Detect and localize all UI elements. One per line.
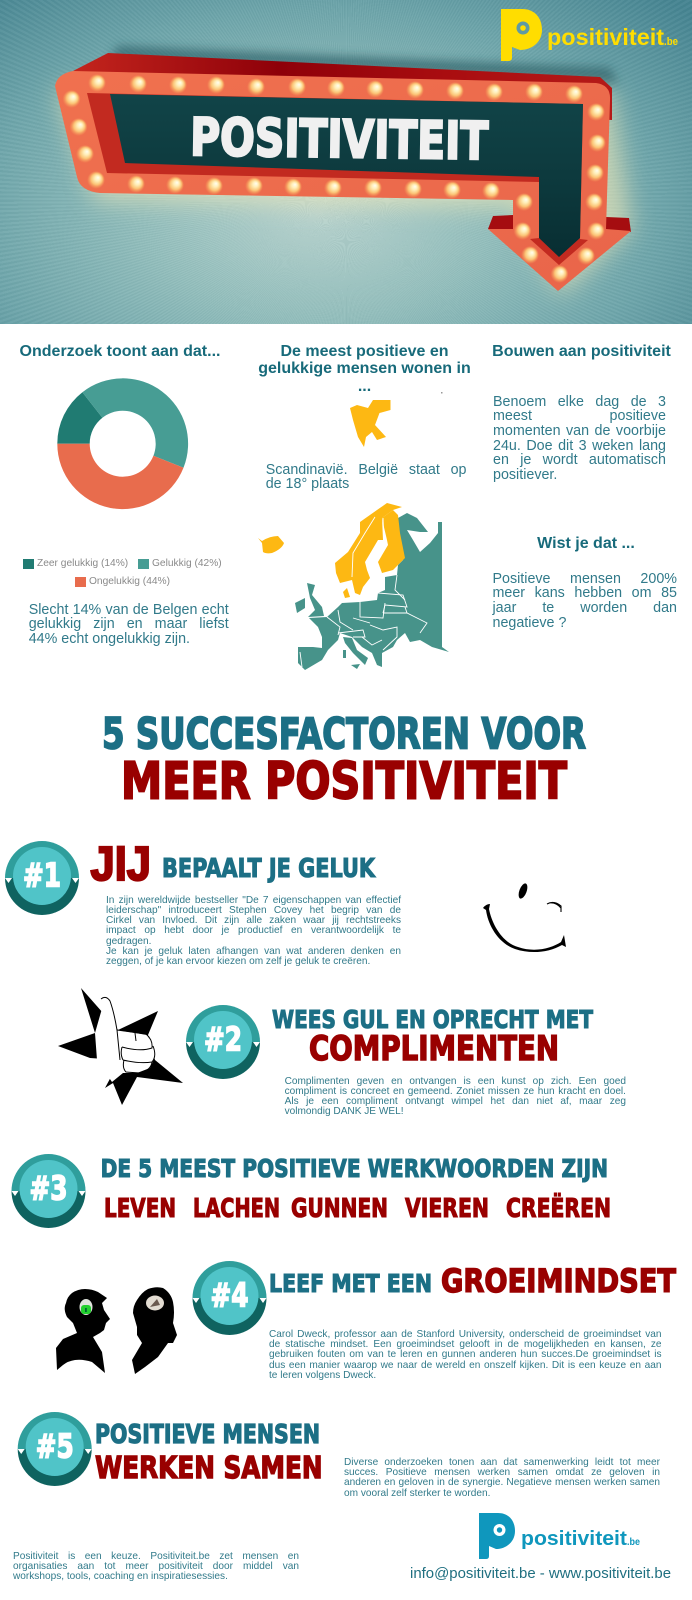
heading: leef met een: LEEF MET EEN (269, 1269, 432, 1298)
verbs list: LACHEN (193, 1194, 280, 1224)
logo: blue positiviteit.be: positiviteit (521, 1528, 627, 1550)
text: wist je dat: jaar te worden dan (492, 600, 677, 616)
text: Scandinavië: de 18° plaats (266, 476, 349, 492)
text: factor 1: zeggen, of je kan ervoor kiezen om zelf je geluk te creëren. (106, 956, 370, 967)
chart legend: Ongelukkig (44%) (89, 576, 170, 586)
text: factor 5: succes. Positieve mensen werken samen omdat ze geloven in (344, 1467, 660, 1478)
text: wist je dat: Positieve mensen 200% (492, 571, 677, 587)
heading: bepaalt je geluk: BEPAALT JE GELUK (162, 854, 376, 884)
text: factor 1: In zijn wereldwijde bestseller "De 7 eigenschappen van effectief (106, 895, 401, 906)
text: factor 1: leiderschap" introduceert Stephen Covey het begrip van de (106, 905, 401, 916)
text: bouwen: momenten van de voorbije (493, 423, 666, 439)
badge #5 (18, 1412, 92, 1486)
text: footer intro: workshops, tools, coaching en inspiratiesessies. (13, 1571, 228, 1582)
text: slecht 14% (29, 602, 229, 647)
panel: factor 3 (12, 1154, 611, 1228)
badge #3: #3 (30, 1168, 68, 1208)
text: factor 4: te leren volgens Dweck. (269, 1370, 376, 1381)
logo: yellow positiviteit.be (501, 9, 678, 61)
text: bouwen: meest positieve (493, 408, 666, 424)
badge #5: #5 (36, 1426, 74, 1466)
verbs list: LEVEN (104, 1194, 176, 1224)
logo: yellow positiviteit.be: positiviteit (547, 24, 664, 50)
text: factor 4: gebruiken fouten om van te leren en gunnen anderen hun succes.De groeimindset is (269, 1349, 662, 1360)
logo: blue positiviteit.be: .be (627, 1537, 640, 1548)
text: slecht 14%: gelukkig zijn en maar liefst (29, 616, 229, 632)
title line: meer positiviteit: MEER POSITIVITEIT (121, 752, 567, 812)
text: factor 4 (269, 1329, 662, 1381)
text: wist je dat: meer kans hebben om 85 (492, 585, 677, 601)
verbs list: CREËREN (506, 1192, 611, 1224)
icon: thumbs up on star (58, 988, 183, 1105)
chart legend: Gelukkig (42%) (152, 558, 222, 568)
badge #2: #2 (204, 1020, 242, 1058)
text: Scandinavië: Scandinavië. België staat op (266, 462, 466, 478)
contact line: info@positiviteit.be - www.positiviteit.be (410, 1566, 671, 1582)
map: Svalbard (350, 392, 442, 447)
text: factor 5: anderen en geloven in de synergie. Negatieve mensen werken samen (344, 1477, 660, 1488)
text: factor 2 (284, 1076, 626, 1117)
heading: meest positieve mensen: ... (358, 378, 371, 395)
verbs list (104, 1192, 611, 1224)
heading: bouwen: Bouwen aan positiviteit (492, 342, 671, 360)
text: footer intro: organisaties aan tot meer positiviteit door middel van (13, 1561, 299, 1572)
text: factor 4: dus een manier waarop we naar de wereld en onszelf kijken. Dit is een keuze en aan (269, 1360, 662, 1371)
text: Scandinavië (266, 462, 466, 492)
text: factor 2: Als je een compliment ontvangt wimpel het dan niet af, maar zeg (285, 1096, 626, 1107)
text: factor 5 (344, 1457, 660, 1499)
panel: factor 4 (56, 1261, 676, 1381)
text: bouwen: 24u. Doe dit 3 weken lang (493, 438, 666, 454)
chart legend (23, 558, 222, 587)
text: slecht 14%: 44% echt ongelukkig zijn. (29, 631, 190, 647)
panel: factor 5 (18, 1412, 660, 1499)
heading: meest positieve mensen: De meest positieve en (280, 342, 449, 360)
logo: yellow positiviteit.be: .be (664, 36, 678, 48)
text: factor 1: gedragen. (106, 936, 151, 947)
badge #1: #1 (23, 856, 61, 894)
sign shadow and glow (55, 46, 632, 295)
heading: meest positieve mensen: gelukkige mensen wonen in (258, 360, 471, 377)
heading: werken samen: WERKEN SAMEN (95, 1451, 323, 1486)
icon: silhouettes with mindset (56, 1287, 177, 1374)
text: factor 1: Cirkel van Invloed. Dit zijn alle zaken waar jij rechtstreeks (106, 915, 401, 926)
text: factor 1: Je kan je geluk laten afhangen van wat anderen denken en (106, 946, 401, 957)
heading: positieve mensen: POSITIEVE MENSEN (95, 1420, 320, 1450)
heading: complimenten: COMPLIMENTEN (309, 1029, 559, 1069)
icon: winking smiley (483, 882, 566, 952)
badge #3 (12, 1154, 86, 1228)
text: wist je dat (492, 571, 677, 631)
donut chart (57, 378, 188, 509)
text: factor 5: Diverse onderzoeken tonen aan dat samenwerking leidt tot meer (344, 1457, 660, 1468)
text: slecht 14%: Slecht 14% van de Belgen echt (29, 602, 229, 618)
text: factor 2: volmondig DANK JE WEL! (285, 1106, 404, 1117)
arrow sign (55, 53, 631, 291)
heading: jij: JIJ (90, 838, 151, 891)
heading: wist je dat: Wist je dat ... (537, 534, 635, 552)
panel: hero banner (0, 0, 692, 324)
text: footer intro: Positiviteit is een keuze. Positiviteit.be zet mensen en (13, 1551, 299, 1562)
panel: factor 1 (5, 838, 566, 967)
badge #4: #4 (210, 1276, 248, 1314)
panel: main heading (102, 710, 586, 812)
text: bouwen: positiever. (493, 467, 557, 483)
text: factor 1 (106, 895, 402, 967)
panel: factor 2 (58, 988, 626, 1117)
text: factor 4: de statische mindset. Een groeimindset gelooft in de mogelijkheden en kansen, ze (269, 1339, 662, 1350)
text: factor 5: om vooral zelf sterker te worden. (344, 1488, 490, 1499)
verbs list: GUNNEN (291, 1194, 388, 1224)
verbs list: VIEREN (405, 1194, 489, 1224)
panel: intro facts (20, 342, 677, 670)
text: factor 2: compliment is concreet en gemeend. Zoniet missen ze hun kracht en doel. (285, 1086, 626, 1097)
text: footer intro (13, 1551, 299, 1582)
heading: onderzoek: Onderzoek toont aan dat... (20, 342, 220, 360)
badge #1 (5, 841, 79, 915)
heading: meest positieve mensen (258, 342, 471, 395)
text: factor 1: impact op hebt door je productief en verantwoordelijk te (106, 925, 401, 936)
logo: blue positiviteit.be (479, 1513, 640, 1559)
badge #4 (192, 1261, 266, 1335)
text: bouwen: en je wordt automatisch (493, 452, 666, 468)
text: bouwen (493, 394, 666, 483)
text: wist je dat: negatieve ? (492, 615, 566, 631)
text: factor 2: Complimenten geven en ontvangen is een kunst op zich. Een goed (285, 1076, 626, 1087)
badge #2 (186, 1005, 260, 1079)
text: bouwen: Benoem elke dag de 3 (493, 394, 666, 410)
chart legend: Zeer gelukkig (14%) (37, 558, 128, 568)
panel: footer (13, 1513, 671, 1582)
map: Europe (258, 503, 449, 670)
light bulbs (62, 74, 606, 283)
text: factor 4: Carol Dweck, professor aan de Stanford University, onderscheid de groeimindset van (269, 1329, 662, 1340)
heading: wees gul en oprecht met: WEES GUL EN OPRECHT MET (272, 1005, 593, 1034)
sign title: POSITIVITEIT (190, 108, 489, 172)
